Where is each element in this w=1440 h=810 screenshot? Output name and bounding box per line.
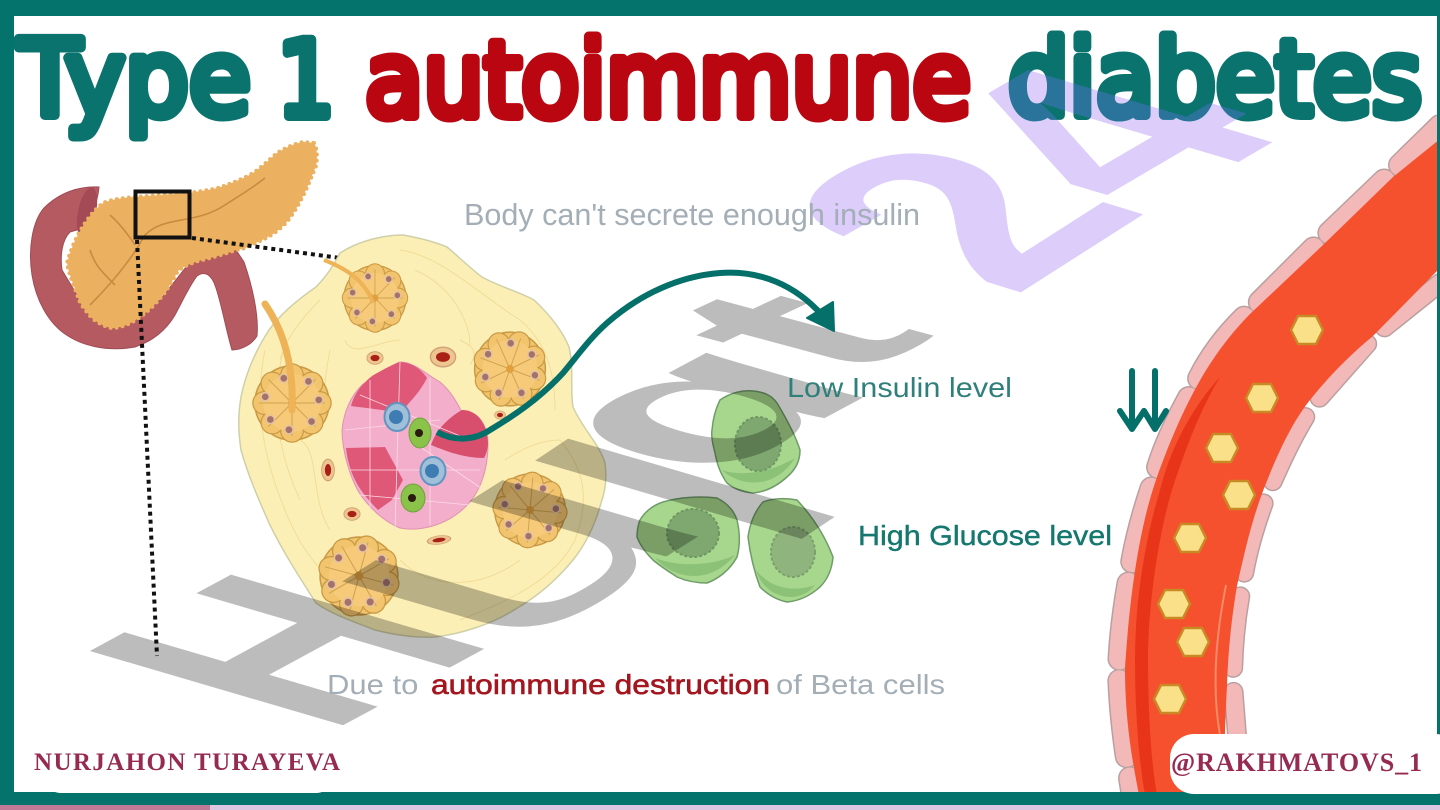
islet of Langerhans xyxy=(342,362,488,530)
glucose molecules xyxy=(1154,316,1323,713)
damaged cell right xyxy=(748,499,833,602)
caption: autoimmune destruction of beta cells: of Beta cells xyxy=(776,669,945,700)
watermark: grey word running diagonally: l xyxy=(452,408,930,573)
acinus cluster lower right xyxy=(478,456,582,564)
watermark: grey word running diagonally: ɑ xyxy=(437,310,945,500)
title xyxy=(18,18,1422,141)
duodenum xyxy=(30,187,257,350)
acinus cluster top xyxy=(342,264,408,332)
cell grid xyxy=(345,362,484,530)
caption: autoimmune destruction of beta cells: Due to xyxy=(327,669,427,700)
illustration: damaged beta cells xyxy=(637,391,833,602)
pancreatic duct xyxy=(90,178,265,305)
illustration: pancreatic tissue cross-section xyxy=(239,235,606,637)
outer wall cells xyxy=(1119,126,1440,810)
damaged cell left xyxy=(637,497,739,583)
darker vessel streak xyxy=(1135,377,1220,800)
watermark: lilac number 24: 4 xyxy=(832,32,1375,234)
author name: NURJAHON TURAYEVA xyxy=(34,749,340,776)
damaged cell top xyxy=(712,391,800,493)
icon: double down arrows xyxy=(1120,371,1166,429)
illustration: blood vessel with glucose xyxy=(1119,126,1440,810)
caption: autoimmune destruction of beta cells: autoimmune destruction xyxy=(431,669,770,700)
beta cell, blue, lower xyxy=(420,457,446,485)
inner wall cells xyxy=(1233,283,1440,735)
tissue blob xyxy=(239,235,606,637)
title word: 1: 1 xyxy=(277,19,335,141)
dotted zoom guide to tissue xyxy=(192,238,340,258)
watermark: grey word running diagonally: t xyxy=(583,264,1001,395)
zoom box on pancreas xyxy=(136,192,190,238)
watermark: grey word running diagonally: H xyxy=(0,542,579,757)
title word: autoimmune: autoimmune xyxy=(365,19,971,141)
small capillaries xyxy=(322,347,505,546)
title word: Type: Type xyxy=(18,18,251,140)
acinus cluster right xyxy=(462,319,558,419)
acinus cluster left xyxy=(253,364,331,442)
label: low insulin level: Low Insulin level xyxy=(787,372,1012,403)
green cell, lower xyxy=(401,484,425,512)
dotted zoom guide downward xyxy=(137,240,157,656)
duct left xyxy=(265,304,292,410)
watermark: grey word running diagonally: u xyxy=(179,423,802,677)
watermark: lilac number 24 xyxy=(689,32,1375,321)
watermark: grey word running diagonally xyxy=(0,264,1001,757)
vessel lumen xyxy=(1125,139,1440,800)
arrow: islet to low insulin xyxy=(437,273,834,439)
watermark tint: 4 over title: 4 xyxy=(832,32,1375,234)
illustration: pancreas with duodenum xyxy=(30,142,317,350)
green cell, upper xyxy=(409,418,431,448)
acinus cluster bottom xyxy=(303,520,415,632)
duodenum opening xyxy=(73,186,101,238)
handle text: @RAKHMATOVS_1 xyxy=(1171,748,1422,777)
watermark: lilac number 24: 2 xyxy=(689,108,1229,321)
handle pill: right xyxy=(1170,734,1440,794)
bottom strip xyxy=(0,805,1440,810)
tissue fibre lines xyxy=(260,250,583,620)
beta cell, blue, upper xyxy=(384,403,410,431)
author pill: left xyxy=(46,738,331,793)
light vessel streak xyxy=(1215,585,1226,735)
label: high glucose level: High Glucose level xyxy=(858,520,1112,551)
pancreas body xyxy=(67,142,317,328)
heading: body can't secrete enough insulin: Body can't secrete enough insulin xyxy=(464,197,920,232)
duct top xyxy=(324,260,373,303)
alpha cell patches xyxy=(351,362,427,413)
